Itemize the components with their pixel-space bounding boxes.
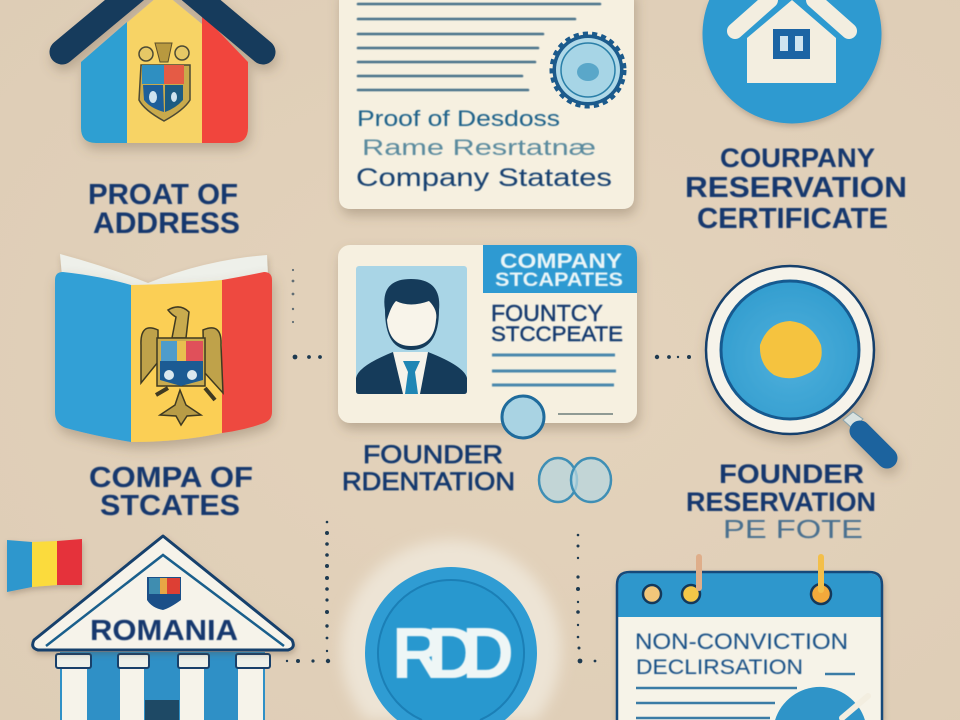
document text: Proof of Desdoss: [357, 106, 560, 131]
icon: card seal: [502, 396, 544, 438]
panel: non-conviction declaration: [617, 557, 882, 720]
panel: company reservation certificate: [685, 0, 907, 235]
panel: founder reservation magnifier: [686, 266, 887, 544]
icon: calendar rings: [643, 557, 831, 604]
document text: Company Statates: [356, 164, 612, 192]
badge halo: [341, 540, 561, 720]
icon: crest: [147, 577, 181, 610]
connector dots: [286, 269, 691, 663]
label: RDD: RDD: [392, 614, 514, 694]
icon: magnifier: [706, 266, 887, 458]
icon: blue circle house: [702, 0, 881, 123]
card header text: COMPANY: [500, 250, 622, 273]
panel: romania building: [7, 536, 293, 720]
heading: company of statutes: STCATES: [100, 490, 240, 522]
calendar text: NON-CONVICTION: [635, 629, 848, 654]
icon: overlapping circles: [539, 458, 611, 502]
icon: book pages: [60, 254, 268, 290]
heading: company reservation certificate: [685, 143, 907, 235]
panel: proof of address house: [62, 0, 263, 240]
icon: flag house: [62, 0, 263, 143]
icon: blue seal: [552, 34, 624, 106]
card lines: [492, 355, 616, 385]
document lines: [358, 4, 600, 90]
icon: columns: [56, 652, 270, 720]
card signature line: [558, 413, 613, 415]
icon: pediment: [33, 536, 293, 650]
document text: Rame Resrtatnæ: [362, 135, 596, 160]
icon: coat of arms shield: [139, 43, 190, 121]
icon: flag book cover: [55, 272, 272, 442]
card text: [491, 300, 623, 346]
pediment inner line: [46, 555, 284, 646]
heading: founder identification: FOUNDER: [363, 441, 503, 469]
heading: company reservation certificate: CERTIFICATE: [697, 203, 888, 235]
icon: yellow blob: [760, 321, 822, 378]
card text: STCCPEATE: [491, 323, 623, 346]
heading: founder reservation: [686, 459, 876, 544]
heading: proof of address: PROAT OF: [88, 179, 238, 211]
icon: founder portrait: [356, 266, 467, 394]
panel: company statutes book: [55, 254, 272, 522]
heading: company of statutes: [89, 462, 253, 522]
heading: founder identification: [342, 441, 515, 496]
heading: company reservation certificate: COURPANY: [720, 143, 875, 173]
calendar text: [635, 629, 848, 679]
card: calendar sheet: [617, 572, 882, 720]
panel: founder identity card: [338, 245, 637, 502]
card header text: STCAPATES: [495, 270, 623, 291]
heading: founder identification: RDENTATION: [342, 468, 515, 496]
card: document sheet: [339, 0, 634, 209]
heading: proof of address: [88, 179, 240, 240]
icon: romanian flag: [7, 539, 82, 592]
card text: FOUNTCY: [491, 300, 603, 326]
heading: founder reservation: RESERVATION: [686, 487, 876, 517]
icon: check badge: [775, 687, 868, 720]
heading: founder reservation: PE FOTE: [723, 514, 863, 544]
icon: RDD badge: [365, 567, 537, 720]
label: romania: ROMANIA: [90, 615, 238, 647]
heading: proof of address: ADDRESS: [93, 207, 240, 240]
panel: RDD badge: [341, 540, 561, 720]
card: identity card: [338, 245, 637, 423]
document text: [356, 106, 612, 192]
heading: company of statutes: COMPA OF: [89, 462, 253, 494]
calendar lines: [636, 674, 855, 718]
card header text: [495, 250, 623, 291]
heading: founder reservation: FOUNDER: [719, 459, 864, 489]
calendar text: DECLIRSATION: [636, 656, 803, 679]
icon: eagle emblem: [141, 307, 223, 425]
panel: proof of address document: [339, 0, 634, 209]
heading: company reservation certificate: RESERVATION: [685, 172, 907, 204]
